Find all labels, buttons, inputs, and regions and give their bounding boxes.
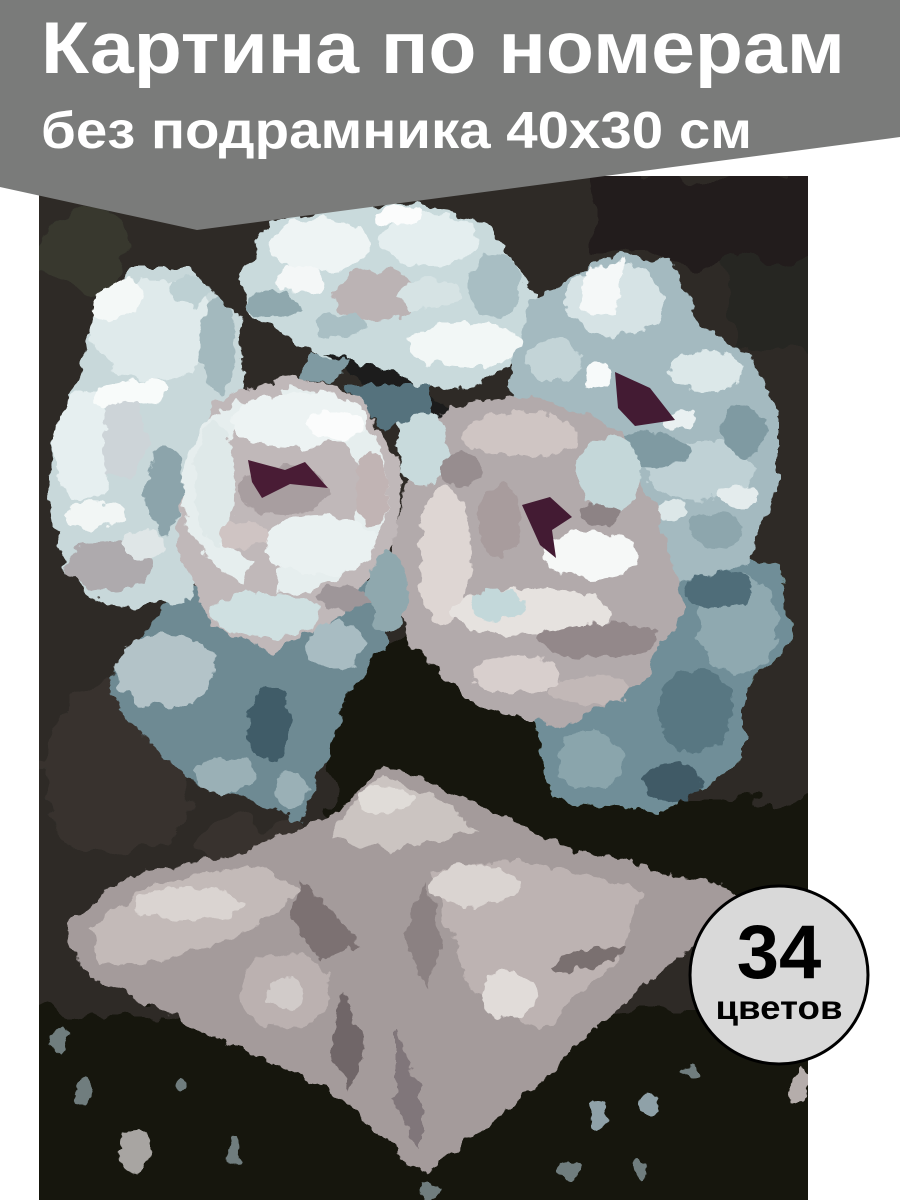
badge: 34 colours: цветов bbox=[716, 989, 842, 1026]
center left flower center bbox=[248, 460, 328, 498]
dark speckled dress spots bbox=[51, 1028, 808, 1199]
shoulders bbox=[65, 765, 745, 1175]
subtitle: без подрамника 40х30 см bbox=[41, 102, 752, 160]
badge: 34 colours: 34 bbox=[737, 910, 821, 995]
title: Картина по номерам bbox=[41, 8, 845, 89]
big right flower bbox=[368, 395, 685, 728]
painting background bbox=[39, 176, 808, 1200]
painting: peonies and shoulders bbox=[39, 176, 808, 1200]
lower flower shadows bbox=[108, 545, 792, 822]
top flower bbox=[238, 202, 535, 390]
center left flower bbox=[178, 375, 402, 652]
left flower bbox=[48, 268, 245, 610]
upper right flower bbox=[510, 255, 778, 590]
badge: 34 colours bbox=[690, 886, 868, 1064]
stems and dark gaps bbox=[298, 352, 449, 432]
big right flower center bbox=[522, 497, 572, 558]
header banner bbox=[0, 0, 900, 230]
upper right flower center bbox=[615, 372, 675, 426]
